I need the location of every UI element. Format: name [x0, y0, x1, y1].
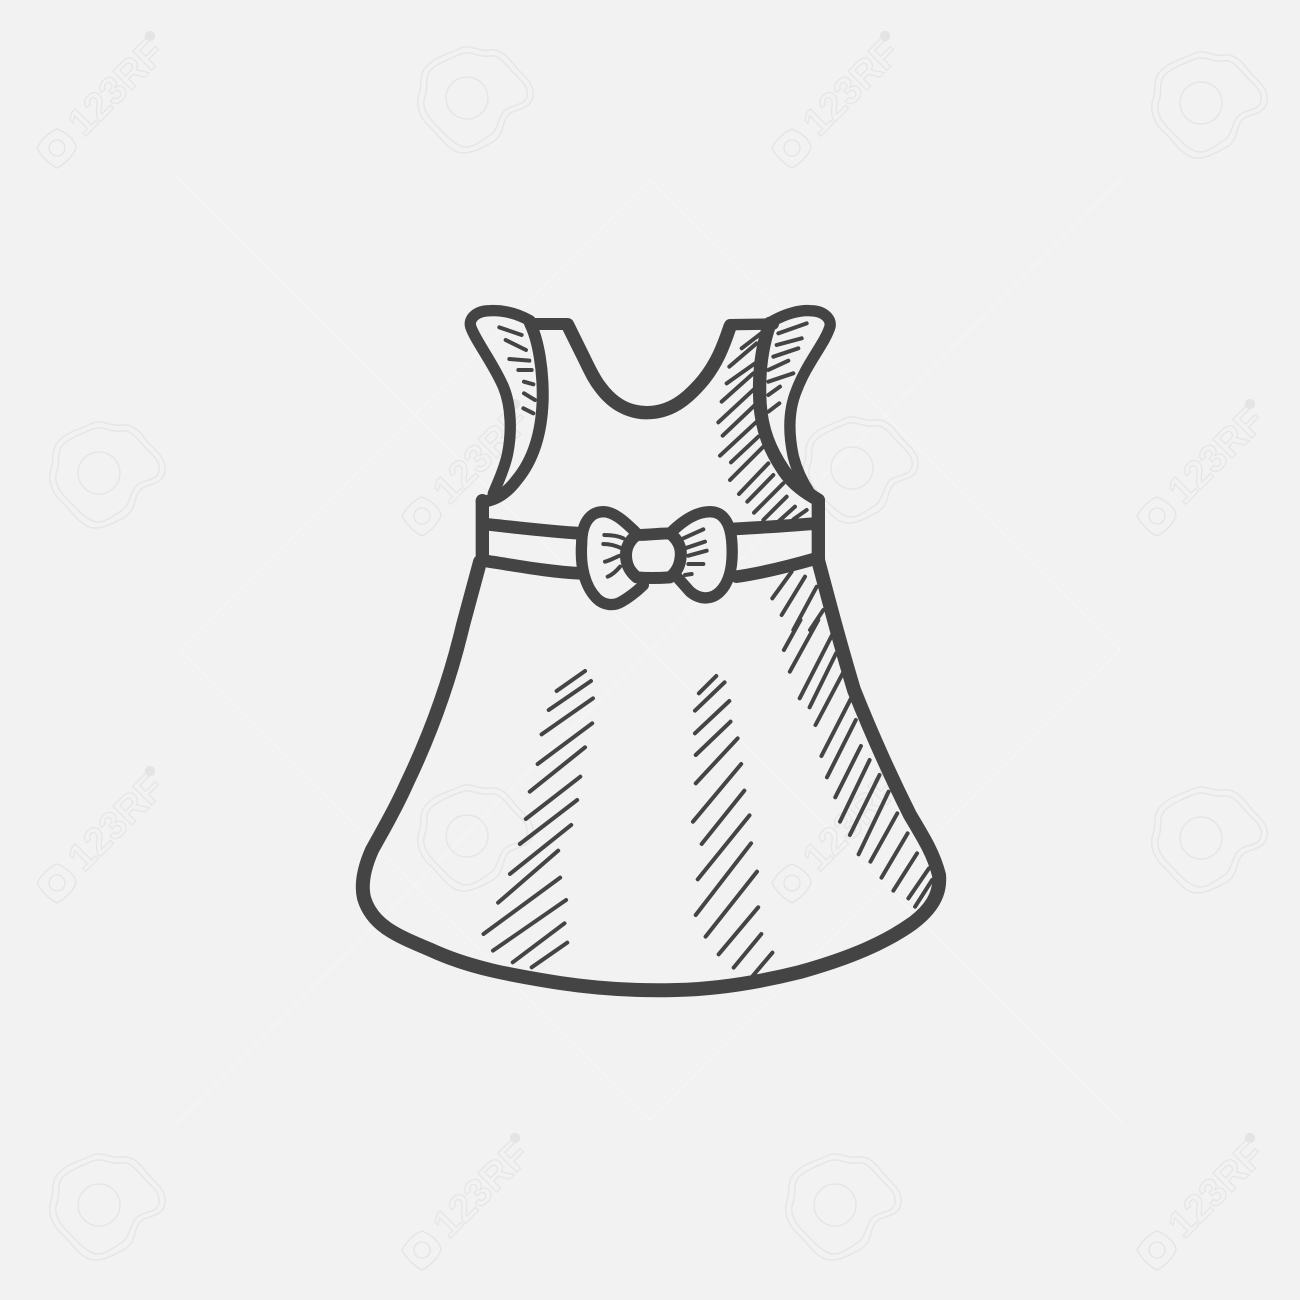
- watermark: egg top centre: [418, 47, 533, 153]
- watermark: 123RF bottom centre: 123RF: [425, 1133, 538, 1246]
- bow right wing: [670, 512, 732, 598]
- dress bodice and belt outline: [470, 311, 830, 605]
- left armhole: [482, 323, 543, 502]
- belt top left: [483, 524, 582, 533]
- watermark: egg row two left: [50, 422, 165, 528]
- bow knot: [626, 533, 681, 578]
- watermark: egg row two right: [803, 417, 918, 523]
- watermark: 123RF row two far right: 123RF: [1160, 399, 1273, 512]
- watermark: egg bottom left: [50, 1154, 165, 1260]
- watermark: 123RF top left: [37, 31, 173, 168]
- icon: dress: [363, 311, 939, 990]
- watermark: 123RF bottom centre: [402, 1133, 538, 1270]
- neckline: [568, 325, 730, 413]
- watermark: egg top far right: [1152, 52, 1267, 158]
- watermark: egg bottom right: [786, 1154, 901, 1260]
- right strap: [730, 307, 773, 342]
- watermark: 123RF bottom far right: [1137, 1133, 1273, 1270]
- bow left wing: [581, 512, 643, 605]
- belt bottom right: [737, 558, 817, 577]
- left sleeve: [470, 311, 530, 493]
- right sleeve: [773, 311, 830, 500]
- watermark: 123RF row three right: 123RF: [795, 766, 908, 879]
- watermark: 123RF row three left: [37, 766, 173, 903]
- watermark: egg row three far right: [1152, 787, 1267, 893]
- watermark: 123RF top right: [772, 31, 908, 168]
- belt left end: [462, 501, 502, 561]
- belt top right: [733, 523, 817, 529]
- right armhole: [760, 323, 818, 500]
- faint construction lines: [176, 176, 1124, 1124]
- belt bottom left: [483, 561, 580, 573]
- dress skirt outline: [363, 560, 939, 990]
- hatching: sleeves and bodice: [499, 323, 823, 630]
- watermark: 123RF top right: 123RF: [795, 31, 908, 144]
- belt right end: [798, 501, 838, 561]
- watermark: 123RF row three right: [772, 766, 908, 903]
- watermark: 123RF bottom far right: 123RF: [1160, 1133, 1273, 1246]
- watermark: 123RF row three left: 123RF: [60, 766, 173, 879]
- watermark: 123RF row two far right: [1137, 399, 1273, 536]
- hatching: skirt folds: [483, 620, 932, 976]
- neckline and straps: [532, 306, 568, 342]
- watermark: 123RF top left: 123RF: [60, 31, 173, 144]
- watermark: 123RF row two centre: 123RF: [425, 399, 538, 512]
- watermark: 123RF row two centre: [402, 399, 538, 536]
- watermark: egg row three centre: [418, 785, 533, 891]
